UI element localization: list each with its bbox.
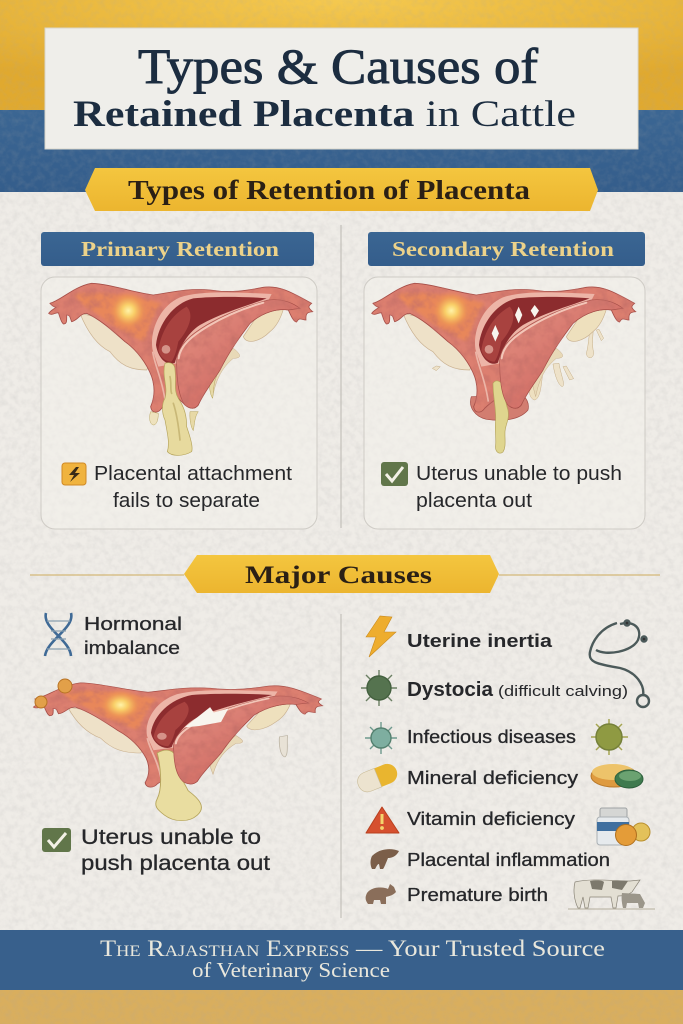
secondary retention heading: Secondary Retention xyxy=(392,237,614,261)
icon: lightning xyxy=(366,616,396,657)
banner: major causes: Major Causes xyxy=(245,562,432,589)
placental inflammation label: Placental inflammation xyxy=(407,850,610,870)
icon: ovary follicles xyxy=(35,679,72,708)
secondary retention heading xyxy=(368,232,645,266)
primary retention heading xyxy=(41,232,314,266)
icon: mineral tablets xyxy=(591,764,643,788)
icon: dna xyxy=(45,613,71,656)
icon: teal virus xyxy=(365,722,397,754)
difficult calving note: (difficult calving) xyxy=(498,683,628,700)
causes caption: push placenta out xyxy=(81,852,270,875)
title: Retained Placenta in Cattle xyxy=(73,94,576,135)
banner: major causes xyxy=(184,555,499,593)
panel: primary retention xyxy=(41,232,317,529)
footer: The Rajasthan Express — Your Trusted Source xyxy=(100,936,605,961)
icon: green check xyxy=(381,462,408,486)
primary caption xyxy=(94,463,292,512)
primary caption: fails to separate xyxy=(113,490,260,512)
icon: lightning square xyxy=(62,463,86,485)
illustration: uterus causes xyxy=(33,683,323,821)
vitamin deficiency label: Vitamin deficiency xyxy=(407,809,575,829)
title: Types & Causes of xyxy=(138,38,538,94)
icon: cow and calf xyxy=(568,880,655,909)
title xyxy=(45,28,638,149)
primary retention heading: Primary Retention xyxy=(81,237,279,261)
top blue band xyxy=(0,110,683,192)
icon: stethoscope xyxy=(590,620,649,707)
hormonal imbalance label: Hormonal xyxy=(84,614,182,634)
icon: green check xyxy=(42,828,71,852)
panel: secondary retention xyxy=(364,232,645,529)
icon: capsule xyxy=(355,761,400,795)
causes caption xyxy=(81,826,270,875)
primary card xyxy=(41,277,317,529)
banner: types of retention: Types of Retention of Placenta xyxy=(128,175,531,205)
icon: calf brown xyxy=(366,884,396,904)
footer background yellow xyxy=(0,990,683,1024)
secondary caption: placenta out xyxy=(416,490,532,512)
illustration: uterus primary xyxy=(49,283,313,455)
dystocia label: Dystocia xyxy=(407,679,494,701)
icon: animal brown xyxy=(370,849,399,869)
hormonal imbalance label: imbalance xyxy=(84,638,180,658)
premature birth label: Premature birth xyxy=(407,885,548,905)
icon: vitamin bottle xyxy=(597,808,650,846)
icon: warning triangle xyxy=(366,807,399,833)
top yellow band xyxy=(0,0,683,110)
causes caption: Uterus unable to xyxy=(81,826,261,849)
secondary caption: Uterus unable to push xyxy=(416,463,622,485)
hormonal imbalance label xyxy=(84,614,182,658)
footer: of Veterinary Science xyxy=(192,958,390,982)
illustration: uterus secondary xyxy=(372,283,636,453)
secondary caption xyxy=(416,463,622,512)
mineral deficiency label: Mineral deficiency xyxy=(407,768,578,788)
panel: left causes xyxy=(33,613,323,875)
infectious diseases label: Infectious diseases xyxy=(407,727,576,747)
uterine inertia label: Uterine inertia xyxy=(407,631,553,651)
icon: olive virus xyxy=(591,719,628,755)
banner: types of retention xyxy=(85,168,598,211)
footer xyxy=(0,930,683,990)
primary caption: Placental attachment xyxy=(94,463,292,485)
icon: green virus xyxy=(361,670,397,706)
secondary card xyxy=(364,277,645,529)
panel: right causes xyxy=(355,616,655,909)
